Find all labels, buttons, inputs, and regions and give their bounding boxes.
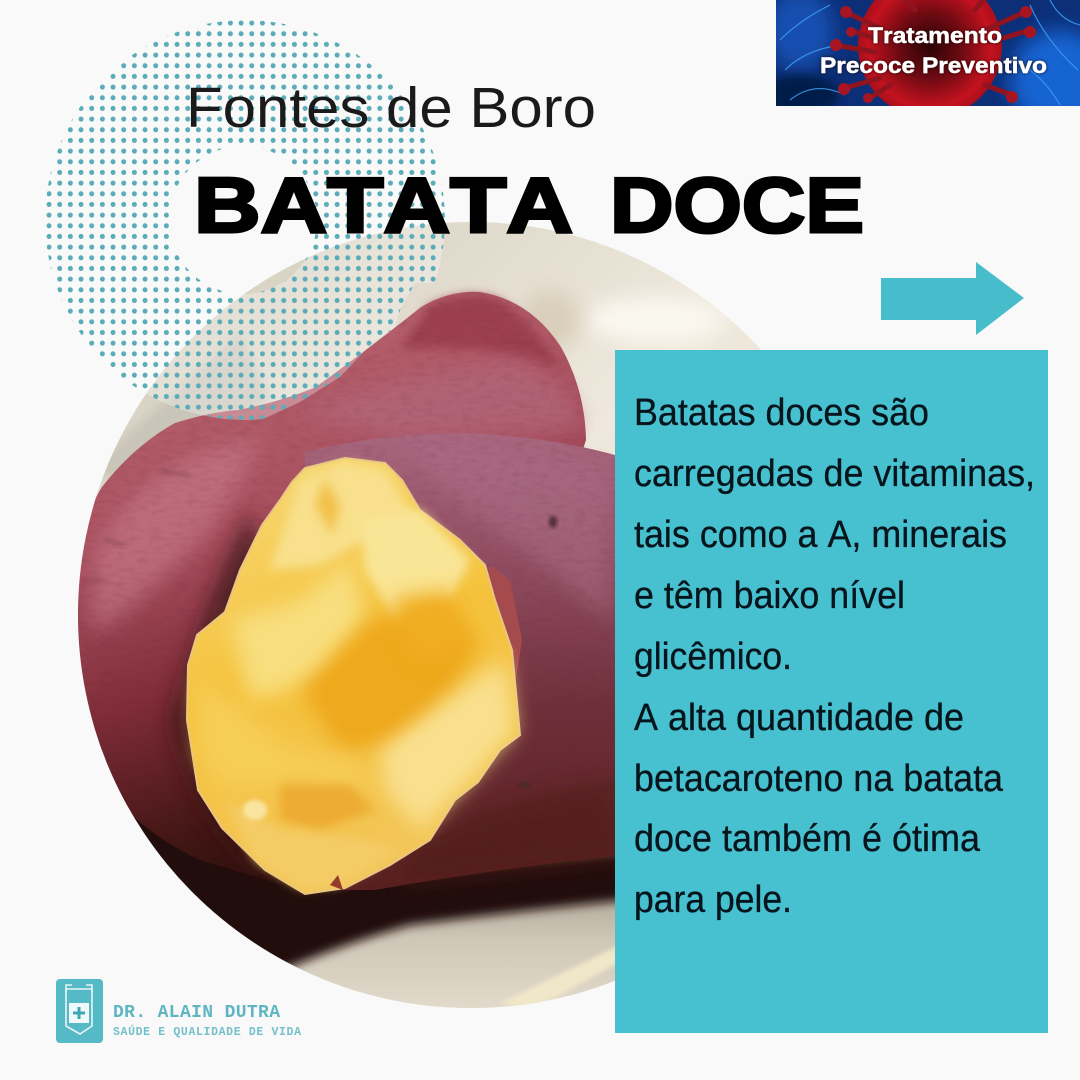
shadow between potatoes xyxy=(163,508,264,812)
banner: Tratamento Precoce Preventivo: Precoce Preventivo xyxy=(820,53,1047,78)
banner: Tratamento Precoce Preventivo xyxy=(776,0,1080,106)
logo: Dr. Alain Dutra: DR. ALAIN DUTRA xyxy=(113,1003,280,1023)
icon: medical bag xyxy=(56,979,103,1043)
arrow xyxy=(881,262,1024,335)
logo: Dr. Alain Dutra xyxy=(56,979,301,1043)
logo: Dr. Alain Dutra: SAÚDE E QUALIDADE DE VIDA xyxy=(113,1025,301,1039)
body text: Batatas doces são xyxy=(634,392,929,434)
heading: BATATA DOCE: BATATA xyxy=(194,161,573,249)
body text: tais como a A, minerais xyxy=(634,514,1007,556)
torn skin edge xyxy=(488,565,522,678)
heading: BATATA DOCE xyxy=(194,161,864,249)
body text: carregadas de vitaminas, xyxy=(634,453,1035,495)
panel: description xyxy=(615,350,1048,1033)
halftone dot ring xyxy=(45,20,445,420)
plate xyxy=(78,222,761,1008)
title: Fontes de Boro: Fontes de Boro xyxy=(186,76,596,140)
front potato skin xyxy=(300,433,625,890)
banner: Tratamento Precoce Preventivo: Tratamento xyxy=(868,23,1002,48)
body text: e têm baixo nível xyxy=(634,575,905,617)
body text: para pele. xyxy=(634,879,792,921)
body text xyxy=(634,392,1035,921)
heading: BATATA DOCE: DOCE xyxy=(610,161,864,249)
photo: sweet potatoes on a plate xyxy=(78,222,761,1008)
back potato xyxy=(50,292,586,890)
body text: A alta quantidade de xyxy=(634,697,964,739)
body text: betacaroteno na batata xyxy=(634,758,1004,800)
potato flesh xyxy=(187,458,520,894)
body text: doce também é ótima xyxy=(634,818,981,860)
body text: glicêmico. xyxy=(634,636,792,678)
ground shadow xyxy=(92,718,615,970)
